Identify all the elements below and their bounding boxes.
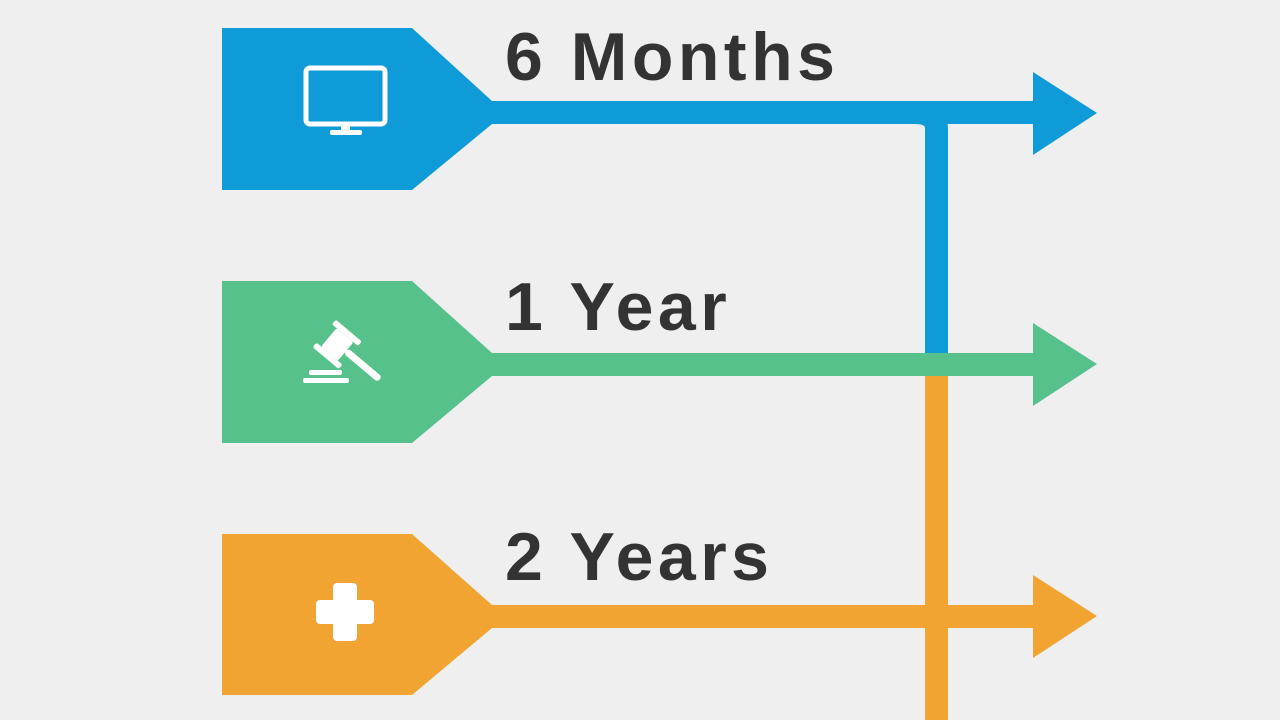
icon: gavel [303, 320, 391, 393]
row: 6 Months [222, 19, 1097, 190]
row: 2 Years [222, 519, 1097, 695]
tag: green [222, 281, 492, 443]
row: 1 Year [222, 269, 1097, 443]
line green [488, 353, 1038, 376]
line orange [488, 605, 1038, 628]
tag: blue [222, 28, 492, 190]
line blue [488, 101, 1038, 124]
arrowhead orange [1033, 575, 1097, 658]
icon: plus [316, 583, 374, 641]
label: 1 Year: 1 Year [505, 269, 731, 345]
vertical connector blue [900, 101, 948, 358]
arrowhead green [1033, 323, 1097, 406]
arrowhead blue [1033, 72, 1097, 155]
icon: monitor [306, 68, 385, 135]
vertical connector orange [925, 374, 948, 720]
label: 6 Months: 6 Months [505, 19, 839, 95]
tag: orange [222, 534, 492, 695]
label: 2 Years: 2 Years [505, 519, 774, 595]
